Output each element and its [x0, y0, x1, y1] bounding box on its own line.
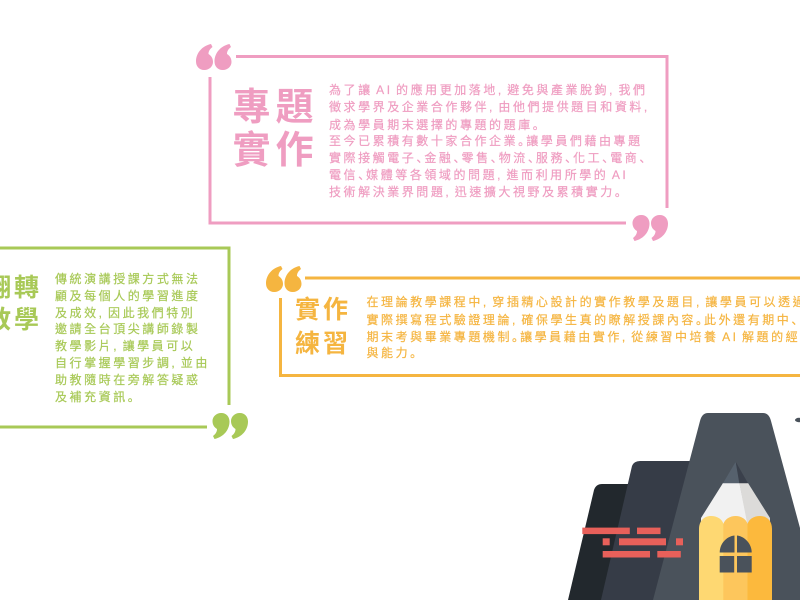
text: 專題實作 description: 徵求學界及企業合作夥伴, 由他們提供題目和資料,: [329, 100, 650, 114]
text: 翻轉教學 description: 顧及每個人的學習進度: [55, 289, 201, 303]
heading: 專題實作: 實作: [232, 119, 319, 174]
text: 實作練習 description: 實際撰寫程式驗證理論, 確保學生真的瞭解授課內容。此外還有期中、: [366, 311, 800, 328]
text: 專題實作 description: [329, 83, 654, 200]
pencil tip: [701, 483, 749, 530]
text: 翻轉教學 description: 教學影片, 讓學員可以: [55, 339, 195, 353]
small dark mark: [795, 418, 800, 422]
heading: 實作練習: [295, 290, 351, 360]
text: 翻轉教學 description: 及補充資訊。: [55, 388, 142, 405]
text: 翻轉教學 description: [55, 272, 210, 405]
text: 翻轉教學 description: 邀請全台頂尖講師錄製: [55, 322, 201, 336]
text: 專題實作 description: 為了讓 AI 的應用更加落地, 避免與產業脫鉤, 我們: [329, 83, 648, 97]
heading: 實作練習: 實作: [295, 290, 351, 326]
heading: 專題實作: 專題: [232, 76, 319, 131]
text: 專題實作 description: 電信、媒體等各領域的問題, 進而利用所學的 AI: [329, 166, 628, 183]
text: 翻轉教學 description: 及成效, 因此我們特別: [55, 306, 195, 320]
pencil body: [699, 516, 724, 600]
heading: 專題實作: [232, 76, 319, 174]
text: 翻轉教學 description: 自行掌握學習步調, 並由: [55, 356, 210, 370]
middle mountain: [601, 461, 700, 600]
text: 實作練習 description: [366, 295, 800, 361]
text: 翻轉教學 description: 傳統演講授課方式無法: [55, 272, 201, 286]
text: 實作練習 description: 在理論教學課程中, 穿插精心設計的實作教學及題目, 讓學員可以透過: [366, 295, 800, 309]
text: 專題實作 description: 至今已累積有數十家合作企業。讓學員們藉由專題: [329, 132, 643, 149]
text: 實作練習 description: 與能力。: [366, 344, 425, 361]
red bricks: [582, 528, 683, 558]
heading: 實作練習: 練習: [295, 324, 351, 360]
front mountain: [653, 413, 800, 600]
heading: 翻轉教學: [0, 268, 42, 336]
text: 專題實作 description: 成為學員期末選擇的專題的題庫。: [329, 116, 547, 132]
text: 翻轉教學 description: 助教隨時在旁解答疑惑: [55, 372, 201, 386]
text: 專題實作 description: 技術解決業界問題, 迅速擴大視野及累積實力。: [329, 182, 629, 200]
text: 專題實作 description: 實際接觸電子、金融、零售、物流、服務、化工、電商、: [329, 149, 654, 166]
back mountain: [568, 484, 640, 600]
window: [720, 536, 752, 572]
